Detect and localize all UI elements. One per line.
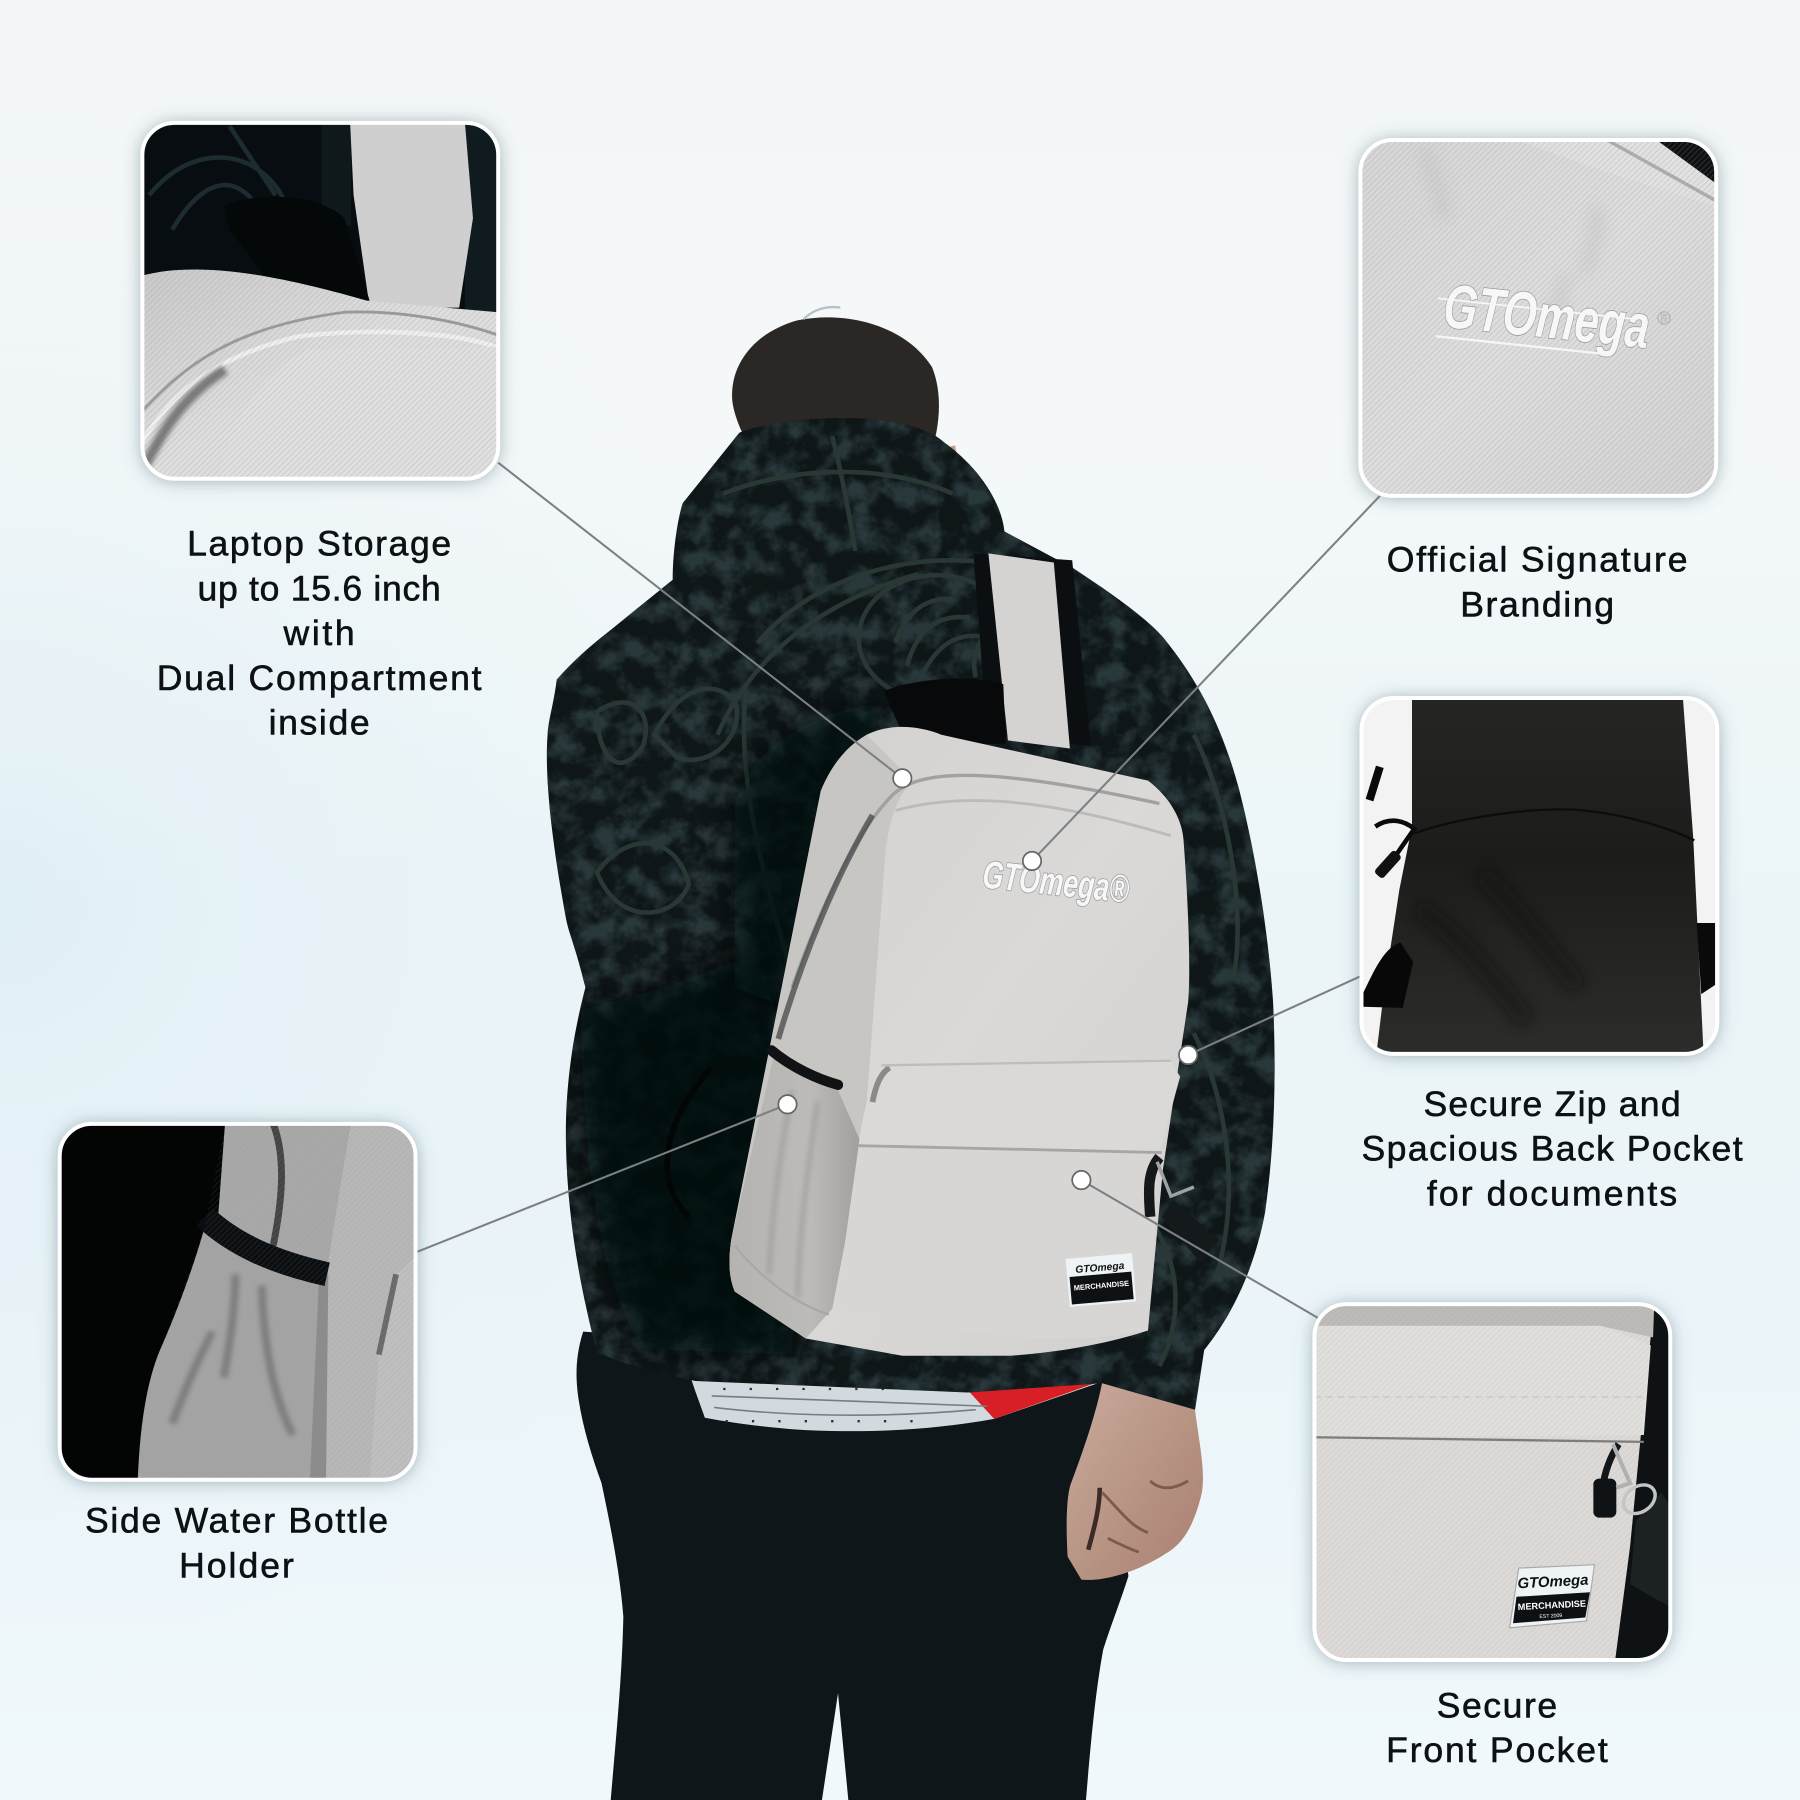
text: laptop storage: with bbox=[283, 613, 355, 653]
panel: secure front pocket detail bbox=[1314, 1304, 1670, 1660]
text: official signature branding: Official Signature bbox=[1387, 540, 1688, 580]
mesh side pocket bbox=[729, 1056, 863, 1339]
logo on bag: GTOmega® bbox=[981, 854, 1131, 912]
logo on branding panel: ® bbox=[1656, 307, 1673, 329]
label: EST 2009 bbox=[1539, 1613, 1563, 1620]
panel: back pocket detail bbox=[1361, 698, 1717, 1054]
text: back pocket: for documents bbox=[1427, 1173, 1677, 1213]
text: back pocket bbox=[1361, 1084, 1743, 1213]
text: back pocket: Secure Zip and bbox=[1423, 1084, 1681, 1124]
zip pull lock bbox=[1149, 1157, 1219, 1263]
backpack bbox=[729, 553, 1219, 1356]
connector line: water bottle holder bbox=[416, 1095, 797, 1252]
label: MERCHANDISE bbox=[1518, 1599, 1586, 1612]
t-shirt hem bbox=[689, 1366, 1104, 1431]
text: water bottle holder: Holder bbox=[179, 1545, 294, 1585]
trousers bbox=[577, 1332, 1128, 1800]
text: secure front pocket: Front Pocket bbox=[1386, 1730, 1608, 1770]
printed artwork on hoodie bbox=[597, 436, 1238, 1366]
text: laptop storage: Dual Compartment bbox=[157, 658, 482, 698]
panel: laptop storage detail bbox=[142, 123, 498, 479]
head and hair bbox=[732, 307, 960, 476]
hoodie bbox=[540, 413, 1286, 1412]
shoulder strap bbox=[884, 553, 1091, 748]
text: water bottle holder: Side Water Bottle bbox=[85, 1501, 388, 1541]
connector line: signature branding bbox=[1023, 496, 1380, 870]
text: laptop storage: inside bbox=[269, 703, 370, 743]
label bbox=[1510, 1565, 1595, 1628]
merchandise label: MERCHANDISE bbox=[1073, 1279, 1129, 1292]
text: official signature branding: Branding bbox=[1460, 584, 1614, 624]
text: secure front pocket: Secure bbox=[1437, 1685, 1557, 1725]
merchandise label: GTOmega bbox=[1075, 1261, 1125, 1276]
merchandise label bbox=[1066, 1253, 1136, 1307]
label: GTOmega bbox=[1517, 1572, 1589, 1592]
connector line: back pocket bbox=[1179, 976, 1361, 1064]
bag body bbox=[729, 727, 1189, 1356]
text: laptop storage: up to 15.6 inch bbox=[197, 568, 441, 608]
logo on branding panel bbox=[1436, 284, 1671, 358]
text: laptop storage: Laptop Storage bbox=[187, 524, 451, 564]
panel: official signature branding detail bbox=[1360, 140, 1716, 496]
side gusset bbox=[729, 735, 913, 1339]
hand bbox=[1067, 1383, 1203, 1580]
text: secure front pocket bbox=[1386, 1685, 1608, 1770]
text: official signature branding bbox=[1387, 540, 1688, 624]
text: laptop storage bbox=[157, 524, 482, 743]
front pocket bbox=[836, 1061, 1180, 1338]
text: back pocket: Spacious Back Pocket bbox=[1361, 1129, 1743, 1169]
logo on branding panel: GTOmega bbox=[1440, 272, 1653, 362]
zip shadow line bbox=[792, 775, 1159, 987]
panel: water bottle holder detail bbox=[60, 1124, 416, 1480]
zip pull bbox=[1593, 1444, 1670, 1607]
text: water bottle holder bbox=[85, 1501, 388, 1585]
connector line: front pocket bbox=[1072, 1171, 1318, 1318]
connector line: laptop storage bbox=[498, 463, 911, 788]
figure: man seen from behind wearing the backpack bbox=[540, 307, 1286, 1800]
